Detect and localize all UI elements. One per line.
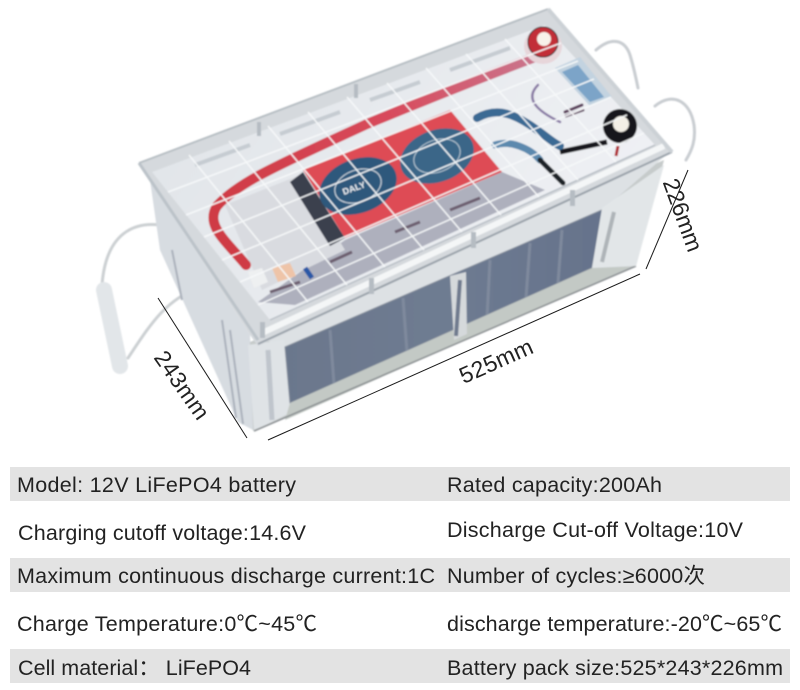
dimension line: 243mm xyxy=(158,298,247,438)
lid inner surface xyxy=(152,25,655,320)
spec: max continuous discharge current: Maximum continuous discharge current:1C xyxy=(17,564,435,588)
spec: discharge cut-off voltage: Discharge Cut-off Voltage:10V xyxy=(447,518,744,542)
lid back rail xyxy=(195,48,510,165)
front lip band xyxy=(250,150,672,347)
blue module xyxy=(555,57,612,106)
spec: charge temperature: Charge Temperature:0℃~45℃ xyxy=(17,612,317,636)
rope handle: left xyxy=(102,225,200,366)
battery front body xyxy=(250,160,664,431)
label: 525mm: 525mm xyxy=(455,333,537,389)
lid grid xyxy=(168,39,644,305)
BMS cooling disc right xyxy=(392,119,482,193)
center divider xyxy=(450,272,467,340)
label: 226mm: 226mm xyxy=(658,175,708,255)
black terminal xyxy=(560,109,637,156)
row band 5 xyxy=(10,649,790,683)
spec: rated capacity: Rated capacity:200Ah xyxy=(447,473,662,497)
blue and black wires xyxy=(477,85,583,183)
spec: charging cutoff voltage: Charging cutoff voltage:14.6V xyxy=(18,521,307,545)
red cable xyxy=(213,56,538,265)
dimension line: 525mm xyxy=(268,274,640,440)
window: dark cell panel xyxy=(285,209,604,403)
dimension line: 226mm xyxy=(646,170,688,269)
rope handles: right xyxy=(596,41,695,160)
row band 1 xyxy=(10,467,790,501)
spec: cell material: Cell material： LiFePO4 xyxy=(18,656,251,680)
spec: battery pack size: Battery pack size:525*243*226mm xyxy=(447,656,783,680)
spec: discharge temperature: discharge temperature:-20℃~65℃ xyxy=(447,612,782,636)
row band 3 xyxy=(10,558,790,592)
spec table xyxy=(10,467,790,683)
lid front lip xyxy=(258,152,672,344)
spec: number of cycles: Number of cycles:≥6000次 xyxy=(447,564,705,588)
BMS cooling disc left xyxy=(311,147,405,225)
battery photo illustration xyxy=(102,9,695,431)
BMS board xyxy=(290,110,502,246)
battery left face xyxy=(150,180,255,431)
label: 243mm: 243mm xyxy=(149,346,215,424)
handle grip xyxy=(104,290,120,366)
cell tops xyxy=(258,172,545,305)
DALY logo text: DALY xyxy=(341,179,367,197)
lid hinge pins xyxy=(257,84,575,338)
cell top detail lines xyxy=(225,175,345,290)
red terminal xyxy=(524,27,562,64)
spec: model: Model: 12V LiFePO4 battery xyxy=(17,473,296,497)
window sill xyxy=(285,267,630,420)
right corner post xyxy=(592,165,664,268)
lid outer frame xyxy=(139,9,672,346)
warning stickers xyxy=(248,263,312,288)
front corner post xyxy=(248,340,292,431)
